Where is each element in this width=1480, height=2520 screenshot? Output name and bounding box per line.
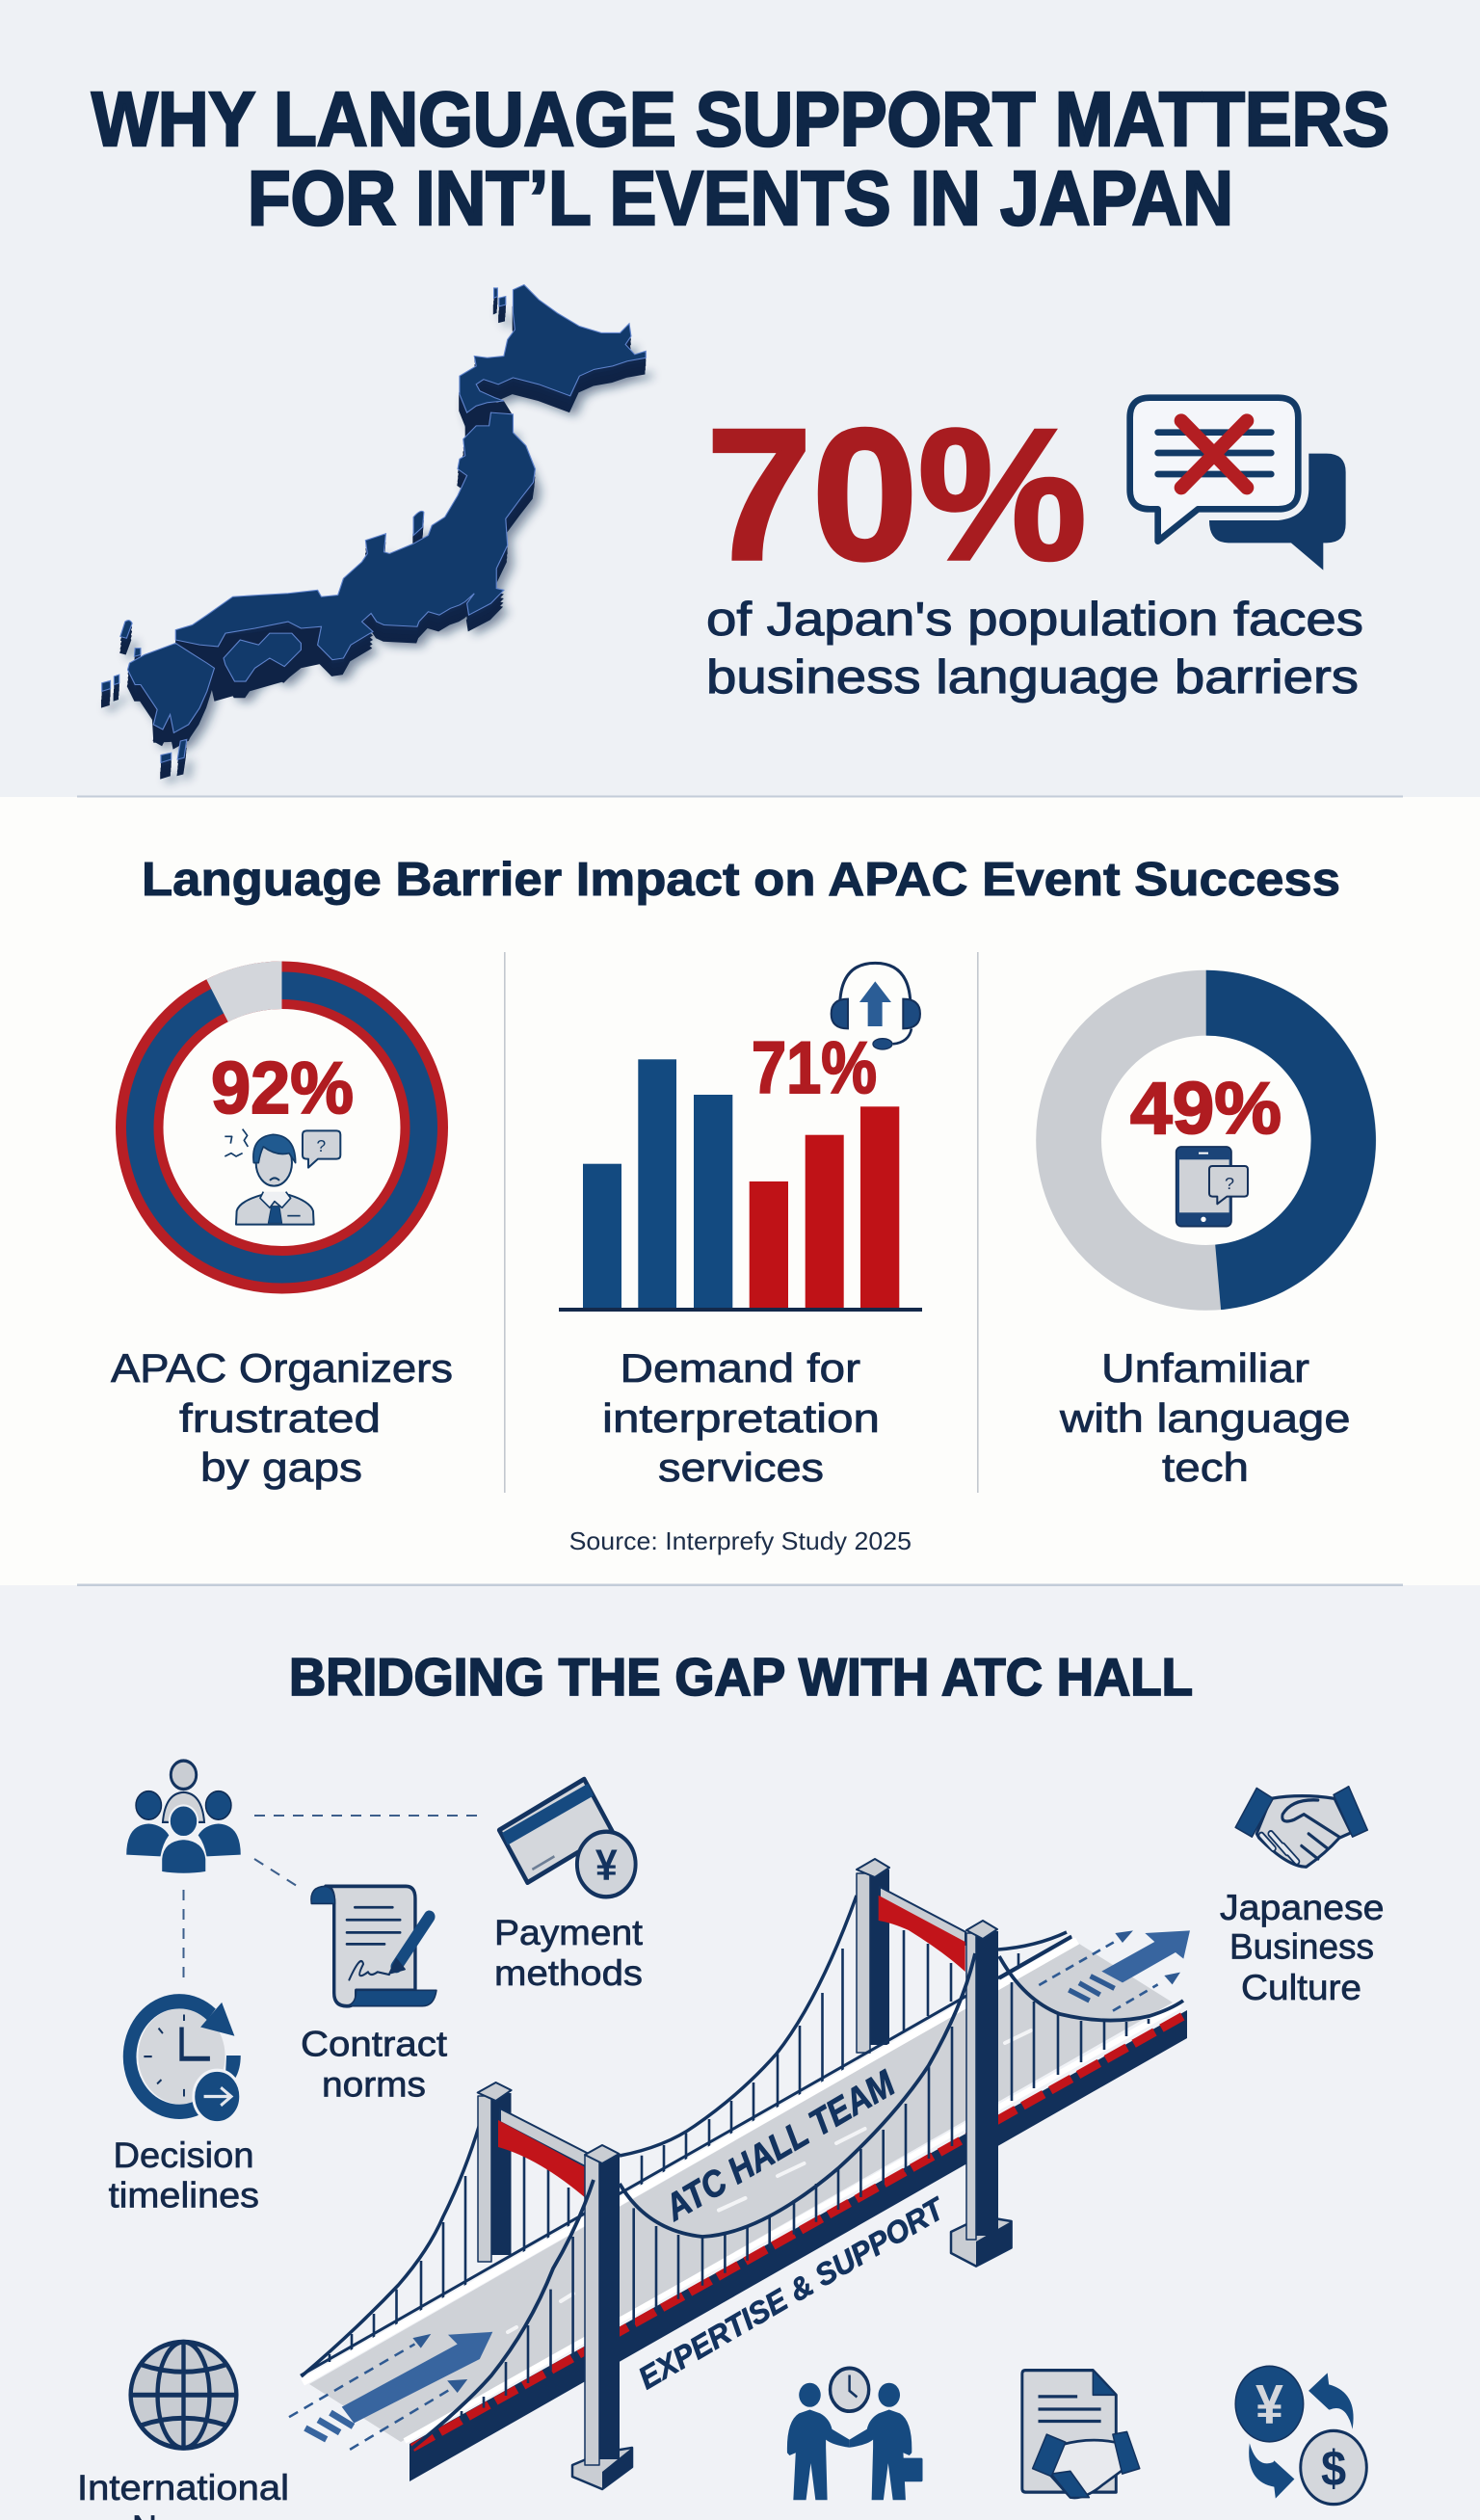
- far towers: [478, 1859, 889, 2262]
- source note: Source: Interprefy Study 2025: [569, 1526, 912, 1555]
- label: japanese business culture: Japanese: [1220, 1888, 1384, 1927]
- icon: crossed out speech bubbles: [1130, 398, 1346, 570]
- donut chart: 92%: [121, 962, 443, 1288]
- cross beams: [498, 1887, 965, 2199]
- icon: payment card and yen coin: [499, 1779, 636, 1897]
- label: contract norms: norms: [322, 2064, 426, 2105]
- map of Japan: [101, 284, 651, 783]
- panel: hero section: [0, 0, 1480, 797]
- near tower right: [951, 1921, 1012, 2267]
- donut chart: 49%: 49%: [1130, 1068, 1282, 1150]
- label: international norms: International: [77, 2468, 289, 2507]
- bar chart: 71%: [559, 963, 922, 1312]
- bridge illustration: [289, 1859, 1190, 2489]
- stat description: business language barriers: [706, 651, 1359, 703]
- title: [92, 76, 1389, 241]
- label: contract norms: [301, 2024, 448, 2105]
- bar chart: 71%: 71%: [752, 1027, 877, 1109]
- arrows leaving to right: [1039, 1930, 1190, 2011]
- icon: contract scroll and pen: [311, 1886, 436, 2006]
- donut chart: 92%: 92%: [211, 1048, 354, 1129]
- label: 71%: Demand for: [621, 1345, 860, 1391]
- label: contract norms: Contract: [301, 2024, 448, 2064]
- icon: document with handshake: [1022, 2371, 1140, 2498]
- title: FOR INT’L EVENTS IN JAPAN: [248, 155, 1233, 241]
- label: 49%: Unfamiliar: [1101, 1345, 1309, 1391]
- stat description: of Japan's population faces: [706, 594, 1363, 646]
- label: 49%: [1059, 1345, 1351, 1490]
- label: 49%: with language: [1059, 1395, 1351, 1441]
- icon: phone with question: ?: [1225, 1174, 1234, 1193]
- label: 92%: by gaps: [200, 1445, 362, 1490]
- icon: headset with arrow: [832, 963, 920, 1049]
- label: japanese business culture: [1220, 1888, 1384, 2007]
- icon: currency exchange: $: [1321, 2440, 1346, 2497]
- icon: globe: [131, 2342, 236, 2448]
- panel: language barrier impact: [0, 796, 1480, 1586]
- label: decision timelines: timelines: [109, 2176, 259, 2215]
- road label: ATC HALL TEAM: ATC HALL TEAM: [658, 2063, 903, 2229]
- icon: currency exchange: ¥: [1255, 2373, 1283, 2435]
- label: 92%: APAC Organizers: [111, 1345, 453, 1391]
- icon: frustrated person: ?: [316, 1136, 326, 1155]
- near tower left: [572, 2145, 632, 2489]
- donut chart: 49%: [1069, 970, 1376, 1310]
- big stat 70%: 70%: [706, 390, 1087, 599]
- section heading: Language Barrier Impact on APAC Event Success: [142, 854, 1340, 906]
- icon: handshake: [1235, 1787, 1367, 1867]
- deck girder with red dashes: [405, 2005, 1187, 2481]
- near hangers: [462, 1982, 1149, 2421]
- icon: phone with question: [1176, 1147, 1248, 1227]
- label: decision timelines: [109, 2135, 259, 2215]
- label: 92%: [111, 1345, 453, 1490]
- label: decision timelines: Decision: [114, 2135, 254, 2175]
- label: japanese business culture: Business: [1229, 1927, 1374, 1967]
- label: 71%: services: [658, 1445, 824, 1490]
- icon: currency exchange: [1235, 2366, 1366, 2505]
- label: payment methods: methods: [494, 1953, 643, 1993]
- label: payment methods: [494, 1913, 644, 1993]
- icon: business people handshake: [787, 2368, 923, 2500]
- label: 71%: [602, 1345, 880, 1490]
- icon: team group: [126, 1761, 241, 1874]
- title: WHY LANGUAGE SUPPORT MATTERS: [92, 76, 1389, 162]
- far cables and hangers: [302, 1896, 1071, 2376]
- label: japanese business culture: Culture: [1241, 1968, 1361, 2007]
- icon: frustrated person: [225, 1129, 340, 1225]
- girder label: EXPERTISE & SUPPORT: EXPERTISE & SUPPORT: [632, 2190, 952, 2396]
- label: 92%: frustrated: [179, 1395, 381, 1441]
- icon: payment card and yen coin: ¥: [595, 1842, 618, 1890]
- label: payment methods: Payment: [494, 1913, 644, 1952]
- arrows entering from left: [289, 2332, 492, 2450]
- icon: decision clock: [130, 2002, 241, 2123]
- stat description: [706, 594, 1363, 703]
- label: 49%: tech: [1162, 1445, 1249, 1490]
- road deck: [301, 1936, 1173, 2442]
- dashed connectors: [183, 1816, 486, 1980]
- panel: bridging the gap: [0, 1586, 1480, 2520]
- section heading: BRIDGING THE GAP WITH ATC HALL: [289, 1647, 1193, 1707]
- label: 71%: interpretation: [602, 1395, 880, 1441]
- near main cables: [410, 1953, 1183, 2450]
